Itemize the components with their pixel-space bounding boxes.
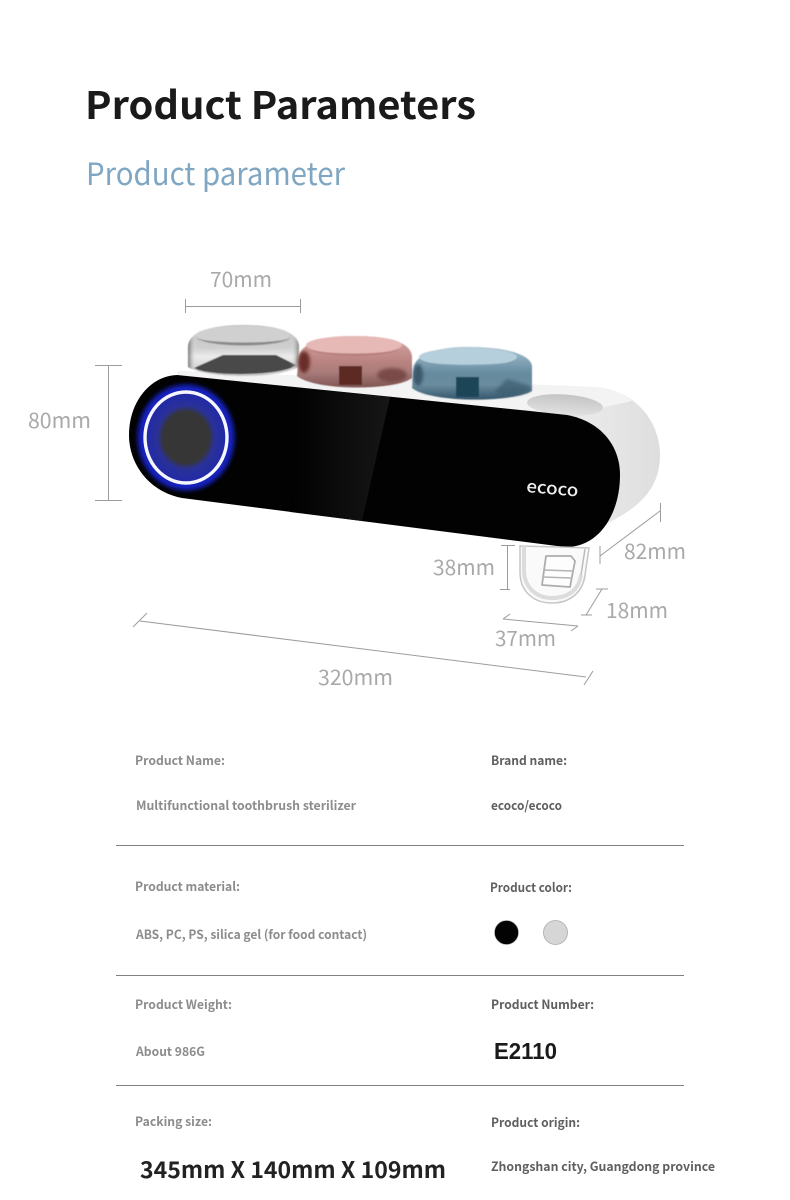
slot opening: [526, 392, 604, 418]
parameter table: [116, 750, 715, 1185]
product number: E2110: [494, 1038, 557, 1064]
product material: ABS, PC, PS, silica gel (for food contact): [135, 924, 367, 943]
dispenser nozzle: [520, 546, 589, 603]
blue cup: [412, 347, 532, 400]
product illustration: ecoco sterilizer: [129, 325, 660, 603]
product weight: About 986G: [135, 1041, 205, 1060]
blue ring light: [142, 389, 230, 486]
product origin: Product origin:: [491, 1112, 580, 1131]
panel sheen: [290, 388, 390, 521]
top surface: [178, 371, 632, 417]
product material: Product material:: [135, 876, 240, 895]
product number: [491, 994, 594, 1064]
dimension: 37mm: 37mm: [495, 623, 556, 653]
white rear body: [178, 371, 660, 545]
brand name: [491, 750, 567, 814]
product weight: [135, 994, 232, 1060]
product material: [135, 876, 367, 943]
dimension: 82mm: [600, 503, 686, 566]
product color: [490, 877, 572, 944]
dimension: 18mm: 18mm: [606, 595, 668, 625]
product number: Product Number:: [491, 994, 594, 1013]
dimension: 320mm: [133, 613, 593, 692]
dimension: 82mm: 82mm: [624, 536, 686, 566]
gray cup: [188, 325, 299, 376]
product name: Product Name:: [135, 750, 225, 769]
product name: Multifunctional toothbrush sterilizer: [136, 795, 357, 814]
dimension: 70mm: [186, 264, 300, 313]
title: Product Parameters: [85, 75, 476, 130]
packing size: Packing size:: [135, 1111, 212, 1130]
packing size: [135, 1111, 446, 1185]
product origin: Zhongshan city, Guangdong province: [491, 1156, 715, 1175]
dimension: 37mm: [495, 614, 578, 653]
dimension: 38mm: [433, 546, 515, 590]
subtitle: Product parameter: [86, 149, 346, 194]
black front panel: [129, 375, 620, 547]
brand name: Brand name:: [491, 750, 567, 769]
packing size: 345mm X 140mm X 109mm: [140, 1151, 446, 1185]
product name: [135, 750, 357, 814]
dimension: 18mm: [581, 589, 668, 625]
dimension: 80mm: [28, 366, 122, 500]
dimension: 38mm: 38mm: [433, 552, 495, 582]
logo: ecoco: [526, 472, 580, 502]
brand name: ecoco/ecoco: [491, 795, 562, 814]
product weight: Product Weight:: [135, 994, 232, 1013]
dimension: 320mm: 320mm: [318, 662, 393, 692]
dimension: 80mm: 80mm: [28, 405, 91, 435]
pink cup: [297, 336, 412, 388]
dimension: 70mm: 70mm: [210, 264, 272, 294]
product color: Product color:: [490, 877, 572, 896]
product origin: [491, 1112, 715, 1175]
